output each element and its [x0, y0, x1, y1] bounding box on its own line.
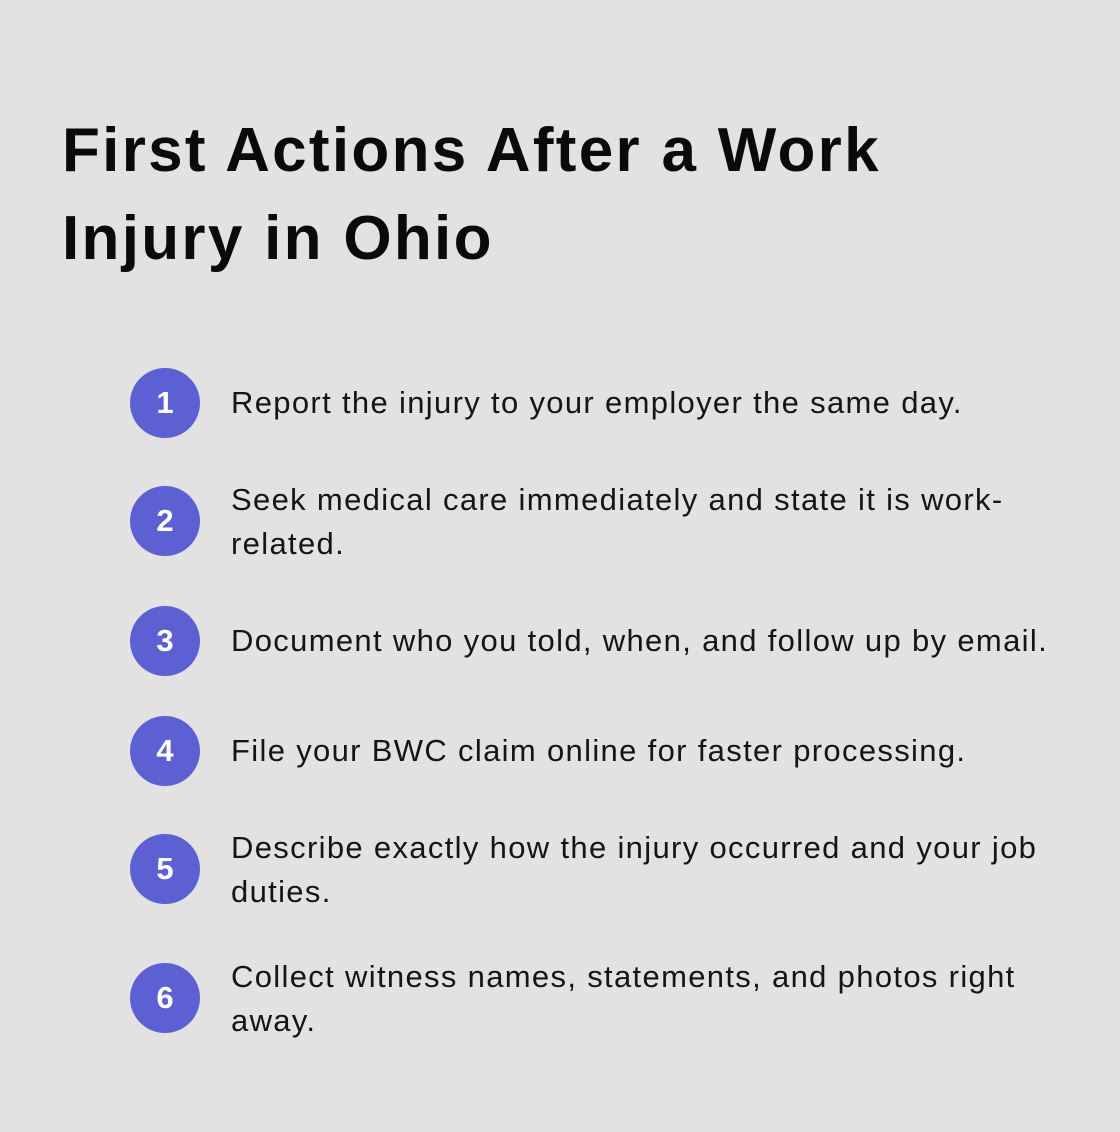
icon: number 3: 3: [156, 623, 174, 658]
icon: number 2: 2: [156, 503, 174, 538]
text: step 5: duties.: [231, 874, 332, 909]
step 4: [130, 716, 966, 786]
icon: number 2: [130, 486, 200, 556]
text: step 6: Collect witness names, statements, and photos right: [231, 959, 1016, 994]
text: step 6: [231, 959, 1016, 1038]
step 1: [130, 368, 963, 438]
title: [62, 116, 881, 273]
icon: number 6: [130, 963, 200, 1033]
icon: number 4: [130, 716, 200, 786]
step 6: [130, 959, 1016, 1038]
text: step 6: away.: [231, 1003, 316, 1038]
icon: number 1: [130, 368, 200, 438]
icon: number 1: 1: [156, 385, 174, 420]
step 3: [130, 606, 1048, 676]
icon: number 3: [130, 606, 200, 676]
icon: number 5: [130, 834, 200, 904]
step 2: [130, 482, 1004, 561]
text: step 1: Report the injury to your employer the same day.: [231, 385, 963, 420]
icon: number 5: 5: [156, 851, 174, 886]
text: step 3: Document who you told, when, and follow up by email.: [231, 623, 1048, 658]
text: step 2: Seek medical care immediately and state it is work-: [231, 482, 1004, 517]
text: step 2: related.: [231, 526, 345, 561]
step 5: [130, 830, 1037, 909]
text: step 5: Describe exactly how the injury occurred and your job: [231, 830, 1037, 865]
icon: number 6: 6: [156, 980, 174, 1015]
title: First Actions After a Work: [62, 116, 881, 185]
text: step 2: [231, 482, 1004, 561]
text: step 5: [231, 830, 1037, 909]
title: Injury in Ohio: [62, 204, 494, 273]
text: step 4: File your BWC claim online for faster processing.: [231, 733, 966, 768]
icon: number 4: 4: [156, 733, 174, 768]
